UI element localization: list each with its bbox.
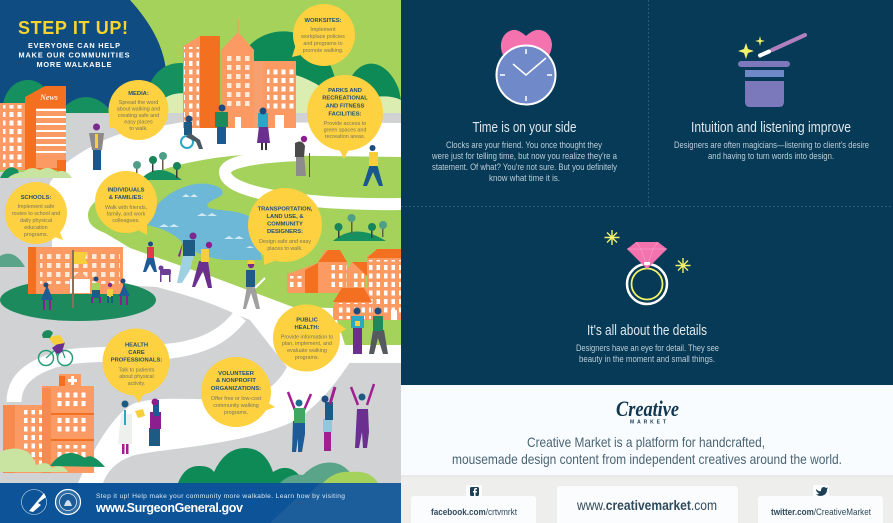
callout: transportation and land use: DESIGNERS: (267, 229, 303, 235)
callout: health care professionals: HEALTH (125, 342, 148, 348)
callout: media: to walk. (129, 126, 148, 132)
callout: worksites: promote walking. (303, 48, 343, 54)
pamphlet (135, 409, 145, 418)
person: man with dog (177, 232, 196, 283)
footer band: surgeon general (0, 483, 401, 523)
school grounds (0, 279, 156, 321)
bushes around hospital (0, 448, 105, 472)
tree cluster right (333, 214, 387, 241)
lake ripples (159, 194, 254, 248)
navy sky (0, 0, 166, 110)
news building (0, 86, 66, 173)
callout: health care professionals: CARE (128, 350, 145, 356)
text: about creative market: Creative Market is a platform for handcrafted, (527, 434, 765, 450)
person: public health man (369, 308, 388, 354)
heading: time: Time is on your side (472, 119, 576, 136)
card: facebook: facebook.com/crtvmrkt (431, 507, 517, 518)
worksite tower left (183, 36, 220, 128)
callout: individuals and families (95, 171, 157, 235)
person: older man with cane (295, 136, 310, 177)
panel: social links footer (401, 476, 893, 523)
person: woman in yellow (192, 242, 212, 288)
callout: transportation and land use: places to walk. (267, 246, 303, 252)
callout: volunteer and nonprofit: & NONPROFIT (216, 378, 256, 384)
callout: parks and recreational: recreation areas. (325, 134, 365, 140)
title block: MAKE OUR COMMUNITIES (18, 50, 130, 60)
callout: individuals and families: family, and work (107, 212, 146, 218)
callout: media: Spread the word (119, 100, 158, 106)
callout: health care professionals: about physical (119, 374, 154, 380)
callout: parks and recreational: green spaces and (324, 128, 366, 134)
callout: schools: daily physical (20, 218, 52, 224)
callout: parks and recreational (307, 75, 383, 159)
callout: worksites (292, 4, 355, 66)
callout: schools: routes to school and (12, 211, 60, 217)
bushes under news building (0, 167, 72, 178)
school children (41, 276, 130, 310)
hospital (3, 374, 94, 473)
hills behind media bubble (143, 63, 213, 113)
text: time: Clocks are your friend. You once thought they (446, 140, 602, 151)
person: cyclist (38, 330, 72, 366)
card: facebook (411, 485, 536, 523)
callout: media: about walking and (117, 106, 160, 112)
callout: parks and recreational: Provide access to (324, 121, 366, 127)
text: intuition (674, 140, 869, 162)
callout: public health (273, 304, 346, 372)
lake (147, 184, 262, 260)
text: time: statement. Of what? You're not sure. But you definitely (432, 162, 617, 173)
icon: magic hat and wand (738, 35, 805, 107)
callout: health care professionals: activity. (128, 381, 145, 387)
callout: volunteer and nonprofit: VOLUNTEER (218, 371, 255, 377)
person: cheering green shirt (288, 392, 311, 452)
person: patient (149, 398, 161, 446)
person: cheering blue shorts (322, 387, 335, 451)
title block: STEP IT UP! (18, 18, 128, 38)
callout: schools: Implement safe (18, 204, 54, 210)
person: child in red (143, 242, 157, 272)
callout: public health: programs. (295, 355, 319, 361)
callout: individuals and families: colleagues. (112, 218, 140, 224)
callout: worksites: and programs to (303, 41, 343, 47)
callout: worksites: WORKSITES: (304, 18, 342, 24)
callout: individuals and families: & FAMILIES: (109, 195, 143, 201)
callout: public health: evaluate walking (287, 348, 327, 354)
text: time: know what time it is. (489, 173, 560, 184)
tree cluster near lake (133, 152, 182, 180)
school building (28, 247, 123, 294)
footer pattern (270, 483, 401, 523)
title block (18, 18, 130, 69)
callout: volunteer and nonprofit: community walking (213, 403, 259, 409)
callout: worksites: workplace policies (300, 34, 345, 40)
title block: MORE WALKABLE (36, 60, 112, 69)
callout: transportation and land use: COMMUNITY (267, 222, 303, 228)
person: woman with skirt (257, 108, 270, 150)
white walking loop (225, 155, 401, 204)
logo: creative market: MARKET (630, 420, 666, 426)
icon: diamond ring (604, 230, 690, 304)
person: cheering purple (351, 384, 374, 448)
gray ground (0, 113, 401, 483)
callout: volunteer and nonprofit: programs. (224, 410, 248, 416)
callout: worksites: Implement (310, 27, 336, 33)
callout: public health: plan, implement, and (282, 341, 332, 347)
callout: public health: HEALTH: (294, 325, 320, 331)
callout: parks and recreational: FACILITIES: (328, 112, 362, 118)
dog (158, 266, 171, 282)
callout: media: creating safe and (118, 113, 159, 119)
callout: volunteer and nonprofit (201, 357, 275, 427)
logo: HHS seal (22, 490, 46, 514)
white main road (49, 122, 401, 367)
callout: parks and recreational: RECREATIONAL (322, 96, 368, 102)
callout: volunteer and nonprofit: Offer free or low-cost (211, 396, 262, 402)
callout: public health: PUBLIC (296, 318, 319, 324)
teal hill behind school (0, 254, 25, 267)
callout: media (108, 80, 168, 140)
callout: volunteer and nonprofit: ORGANIZATIONS: (211, 386, 261, 392)
card: twitter: twitter.com/CreativeMarket (771, 507, 871, 518)
person: wheelchair user (181, 116, 203, 149)
white bike path (14, 316, 240, 402)
callout: transportation and land use: Design safe and easy (259, 239, 311, 245)
white lower road (78, 355, 350, 483)
callout: individuals and families: INDIVIDUALS (107, 188, 145, 194)
callout: parks and recreational: AND FITNESS (326, 104, 364, 110)
worksite tower right (254, 61, 296, 128)
callout: health care professionals (102, 328, 170, 403)
card: website (557, 486, 738, 523)
text: details (576, 343, 719, 365)
heading: intuition: Intuition and listening improve (691, 119, 851, 136)
callout: schools: education (24, 225, 48, 231)
text: intuition: and having to turn words into design. (708, 151, 834, 162)
person: yellow shirt walker (363, 145, 383, 186)
callout: parks and recreational: PARKS AND (328, 88, 362, 94)
green lake park (88, 155, 401, 345)
bottom hills (178, 448, 378, 483)
logo: creative market: Creative (616, 396, 679, 421)
callout: schools: SCHOOLS: (21, 195, 51, 201)
hills behind left buildings (2, 80, 112, 113)
callout: transportation and land use (248, 188, 322, 265)
callout: media: MEDIA: (128, 91, 149, 97)
text: about creative market (452, 434, 842, 467)
person: media walker (89, 124, 104, 170)
callout: schools (5, 182, 67, 244)
town buildings (287, 249, 401, 320)
callout: schools: programs. (24, 232, 48, 238)
callout: transportation and land use: TRANSPORTATION, (258, 206, 313, 212)
callout: health care professionals: Talk to patients (119, 368, 155, 374)
callout: health care professionals: PROFESSIONALS: (111, 358, 162, 364)
footer url: www.SurgeonGeneral.gov (95, 501, 243, 515)
heading: details: It's all about the details (587, 322, 707, 339)
person: green shirt (215, 104, 228, 144)
card: twitter (758, 485, 883, 523)
person: worker with hard hat (243, 260, 265, 309)
hills behind worksite (240, 31, 401, 113)
panel: walkable community illustration (0, 0, 401, 523)
card: website: www.creativemarket.com (576, 498, 717, 513)
worksite tower center (221, 19, 254, 128)
panel: designers dark section (401, 0, 893, 385)
news building: News (39, 93, 58, 102)
callout: transportation and land use: LAND USE, & (266, 214, 304, 220)
callout: media: easy places (124, 120, 153, 126)
icon: clock with heart (496, 30, 556, 105)
title block: EVERYONE CAN HELP (28, 41, 120, 50)
text: time (431, 140, 618, 184)
footer message: Step it up! Help make your community more walkable. Learn how by visiting (96, 493, 345, 500)
logo: surgeon general seal (56, 490, 80, 514)
callout: individuals and families: Walk with friends, (105, 205, 148, 211)
flag (72, 250, 88, 308)
text: time: were just for telling time, but now you realize they're a (431, 151, 618, 162)
panel: creative market white section (401, 385, 893, 476)
person: doctor (118, 400, 132, 454)
text: details: Designers have an eye for detail. They see (576, 343, 719, 354)
person: public health woman (351, 308, 364, 354)
text: details: beauty in the moment and small things. (579, 354, 715, 365)
callout: public health: Provide information to (281, 334, 333, 340)
